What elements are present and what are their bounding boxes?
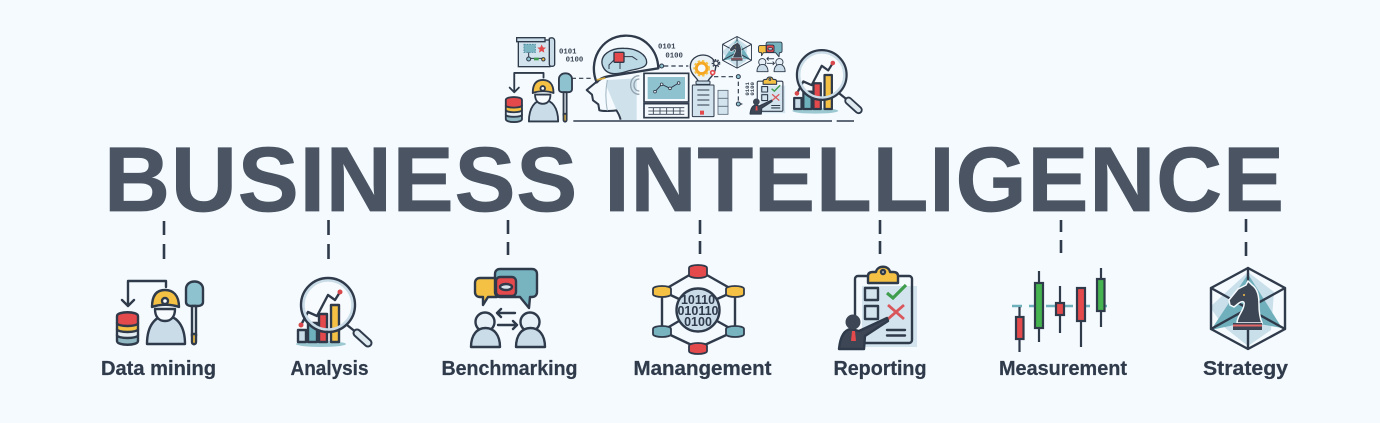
vertical binary text: 0101	[744, 81, 751, 96]
hero icon: data mining	[506, 73, 572, 122]
vertical binary text	[744, 81, 756, 96]
item: benchmarking	[442, 269, 578, 380]
binary digits	[677, 293, 719, 329]
icon: benchmarking	[471, 269, 545, 347]
binary digits: 010110	[677, 304, 719, 318]
title: BUSINESS INTELLIGENCE	[104, 129, 1284, 231]
label: management: Manangement	[634, 357, 772, 380]
item: analysis	[290, 278, 368, 380]
label: benchmarking: Benchmarking	[442, 357, 578, 380]
binary text 2: 0100	[665, 52, 683, 60]
hero icon: benchmarking	[757, 42, 785, 72]
label: strategy: Strategy	[1203, 357, 1289, 380]
item: measurement	[999, 268, 1127, 380]
connector nodes	[660, 64, 740, 106]
hero icon: strategy	[722, 37, 751, 68]
icon: analysis	[296, 278, 368, 347]
hero icon: analysis	[792, 50, 859, 114]
hero icon: blueprint	[517, 38, 555, 67]
icon: data mining	[117, 281, 203, 345]
hero icon: bulb with gears	[690, 55, 720, 84]
binary text 2: 0101	[658, 43, 676, 51]
icon: management network	[653, 265, 744, 354]
binary digits: 0100	[684, 315, 712, 329]
binary text 1	[559, 48, 583, 64]
binary text 2	[658, 43, 683, 60]
binary digits: 10110	[681, 293, 715, 307]
icon: strategy knight	[1210, 268, 1285, 349]
item: management	[634, 265, 772, 380]
hero icon: server and cubes	[692, 85, 728, 117]
vertical binary text: 0100	[749, 81, 756, 96]
dashed connectors	[572, 66, 745, 104]
hero icon: reporting	[750, 77, 785, 114]
icon: candlestick chart	[1012, 268, 1114, 352]
binary text 1: 0100	[566, 56, 583, 64]
hero icon: AI head	[587, 36, 658, 120]
hero illustration	[506, 36, 859, 122]
label: reporting: Reporting	[834, 357, 926, 380]
label: data mining: Data mining	[101, 357, 216, 380]
dashed connector lines	[164, 219, 1246, 259]
hero icon: laptop	[644, 73, 689, 118]
baseline rule	[573, 119, 854, 123]
label: measurement: Measurement	[999, 357, 1127, 380]
label: analysis: Analysis	[290, 357, 368, 380]
item: data mining	[101, 281, 216, 380]
item: strategy	[1203, 268, 1289, 380]
item: reporting	[834, 267, 926, 380]
hero: technology group	[517, 36, 854, 121]
icon: reporting	[839, 267, 917, 349]
binary text 1: 0101	[559, 48, 577, 56]
